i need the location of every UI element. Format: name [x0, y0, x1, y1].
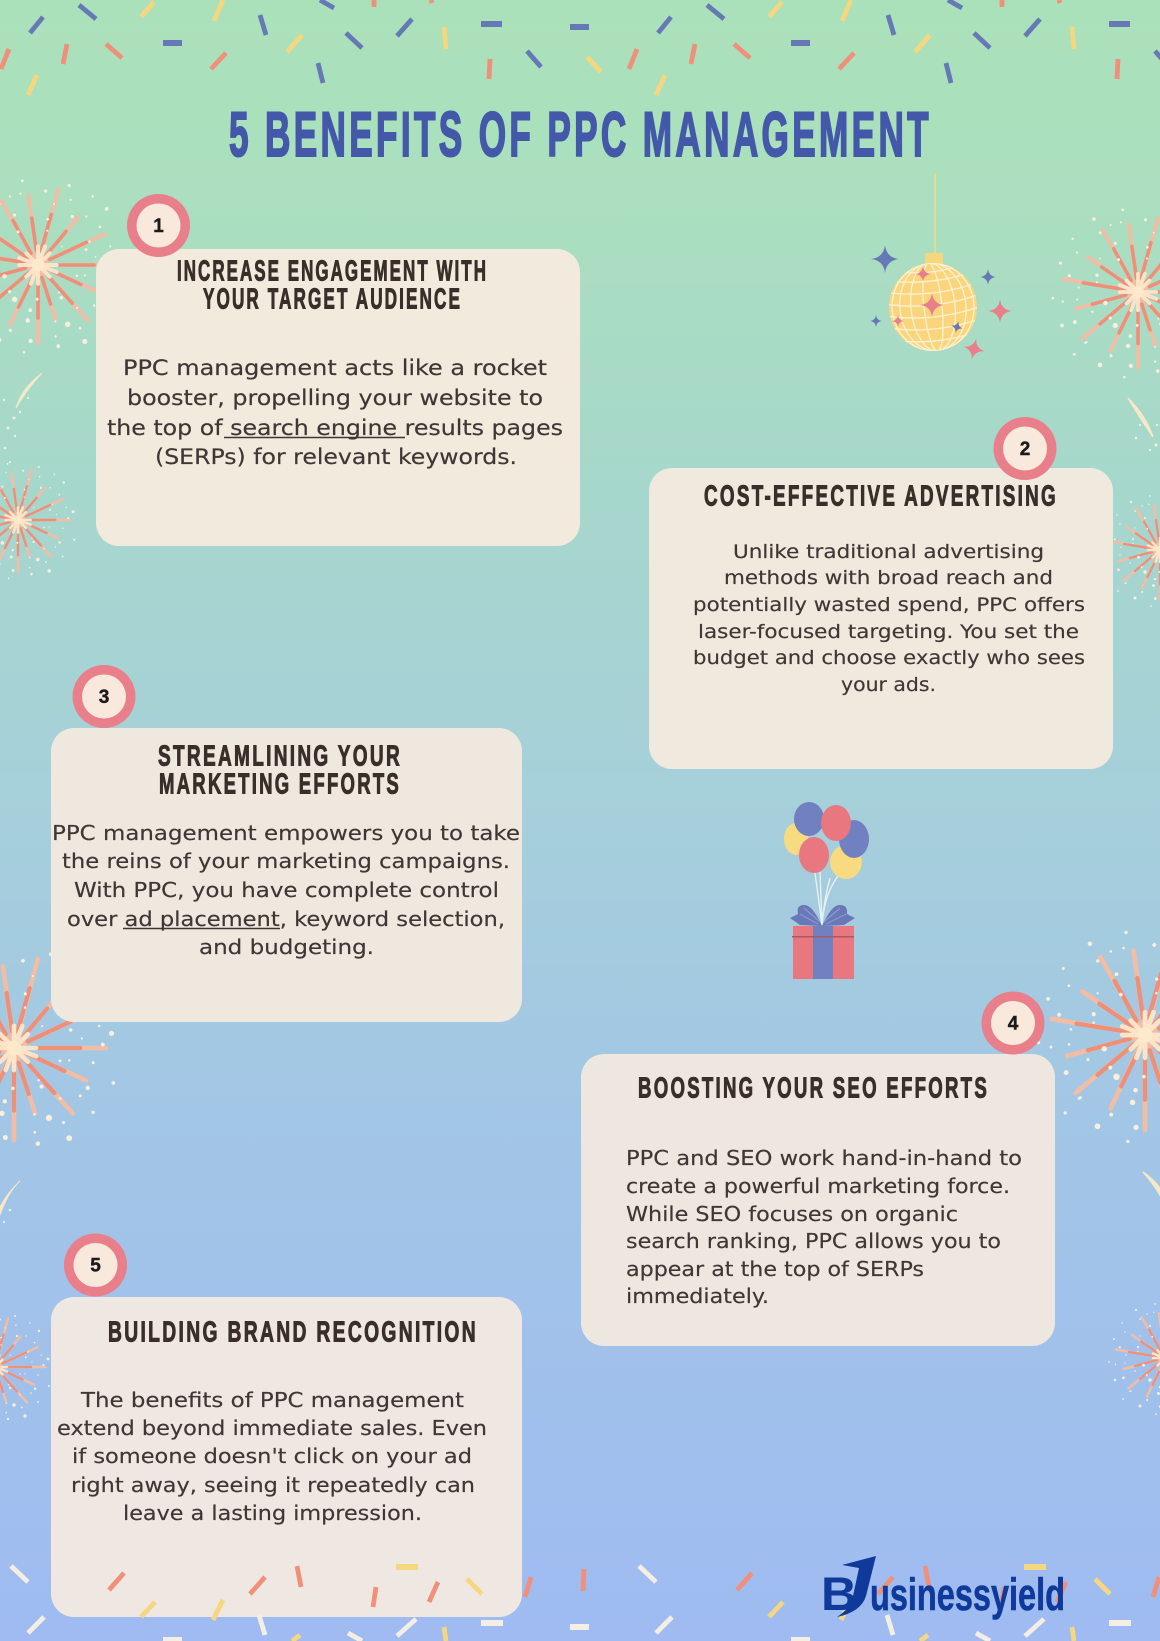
badge: number 2: [994, 417, 1056, 480]
heading: card 1: INCREASE ENGAGEMENT WITH: [177, 256, 488, 288]
heading: card 5: BUILDING BRAND RECOGNITION: [108, 1316, 478, 1348]
text: card 2 body: potentially wasted spend, PPC offers: [693, 594, 1085, 616]
text: card 5 body: extend beyond immediate sales. Even: [57, 1416, 487, 1440]
text: card 5 body: leave a lasting impression.: [123, 1501, 422, 1525]
badge: number 4: 4: [1008, 1014, 1019, 1034]
badge: number 5: 5: [90, 1256, 101, 1276]
firework: right upper: [1035, 191, 1160, 393]
firework: left upper: [0, 161, 140, 369]
text: card 1 body: the top of search engine results pages: [107, 416, 563, 440]
text: card 4 body: PPC and SEO work hand-in-hand to: [626, 1146, 1022, 1170]
icon: disco ball: [889, 173, 977, 351]
text: card 3 body: With PPC, you have complete control: [74, 878, 499, 902]
firework: left lower: [0, 926, 134, 1171]
text: card 1 body: [107, 356, 563, 469]
text: card 1 body: (SERPs) for relevant keywords.: [155, 445, 517, 469]
text: card 4 body: create a powerful marketing force.: [626, 1174, 1010, 1198]
badge: number 2: 2: [1020, 439, 1030, 460]
heading: card 3: [158, 740, 402, 800]
rocket streak: right upper: [1128, 398, 1158, 451]
text: card 1 body: PPC management acts like a rocket: [123, 356, 547, 380]
text: card 2 body: Unlike traditional advertising: [733, 541, 1044, 563]
text: card 5 body: The benefits of PPC management: [80, 1388, 464, 1412]
firework: right lower: [1016, 909, 1160, 1162]
text: card 3 body: over ad placement, keyword selection,: [67, 907, 505, 931]
panel: card 1: [96, 249, 580, 546]
bottom confetti: [11, 1566, 1160, 1641]
badge: number 4: [982, 992, 1044, 1054]
badge: number 3: [72, 665, 136, 728]
panel: card 2: [649, 468, 1113, 769]
text: card 5 body: [57, 1388, 487, 1525]
text: card 2 body: [693, 541, 1085, 696]
heading: card 1: YOUR TARGET AUDIENCE: [203, 284, 462, 316]
panel: card 5: [51, 1297, 522, 1617]
text: card 3 body: [52, 821, 520, 959]
text: card 4 body: search ranking, PPC allows you to: [626, 1229, 1001, 1253]
text: card 2 body: your ads.: [841, 674, 936, 696]
text: card 2 body: methods with broad reach and: [724, 567, 1053, 589]
logo: Businessyield: B: [821, 1567, 857, 1620]
heading: card 1: [177, 256, 488, 316]
badge: number 3: 3: [99, 687, 109, 708]
text: card 4 body: immediately.: [626, 1284, 769, 1308]
text: card 3 body: the reins of your marketing campaigns.: [62, 849, 510, 873]
badge: number 1: 1: [153, 216, 164, 237]
panel: card 4: [581, 1054, 1055, 1346]
firework: right middle: [1092, 484, 1160, 617]
heading: card 3: STREAMLINING YOUR: [158, 740, 402, 772]
firework: left bottom: [0, 1301, 60, 1434]
firework: left middle: [0, 451, 86, 589]
text: card 5 body: if someone doesn't click on your ad: [72, 1444, 472, 1468]
heading: card 3: MARKETING EFFORTS: [159, 768, 401, 800]
badge: number 5: [64, 1234, 127, 1296]
text: card 4 body: While SEO focuses on organic: [626, 1202, 958, 1226]
text: card 1 body: booster, propelling your website to: [127, 386, 543, 410]
text: card 3 body: and budgeting.: [199, 935, 374, 959]
panel: card 3: [51, 728, 522, 1022]
top confetti: [1, 0, 1160, 95]
logo: Businessyield: usinessyield: [870, 1569, 1065, 1620]
text: card 5 body: right away, seeing it repeatedly can: [71, 1473, 475, 1497]
text: card 4 body: [626, 1146, 1022, 1308]
icon: balloons and gift: [784, 802, 869, 979]
text: card 2 body: laser-focused targeting. You set the: [698, 621, 1079, 643]
text: card 4 body: appear at the top of SERPs: [626, 1257, 924, 1281]
text: card 3 body: PPC management empowers you to take: [52, 821, 520, 845]
text: card 2 body: budget and choose exactly who sees: [693, 647, 1085, 669]
badge: number 1: [127, 194, 190, 257]
firework: right bottom: [1097, 1292, 1160, 1425]
logo: Businessyield: [821, 1556, 1065, 1620]
rocket streak: left upper: [3, 373, 42, 463]
rocket streak: right lower: [1143, 1172, 1160, 1195]
icon: sparkles: [870, 245, 1012, 362]
rocket streak: left lower: [0, 1181, 20, 1223]
